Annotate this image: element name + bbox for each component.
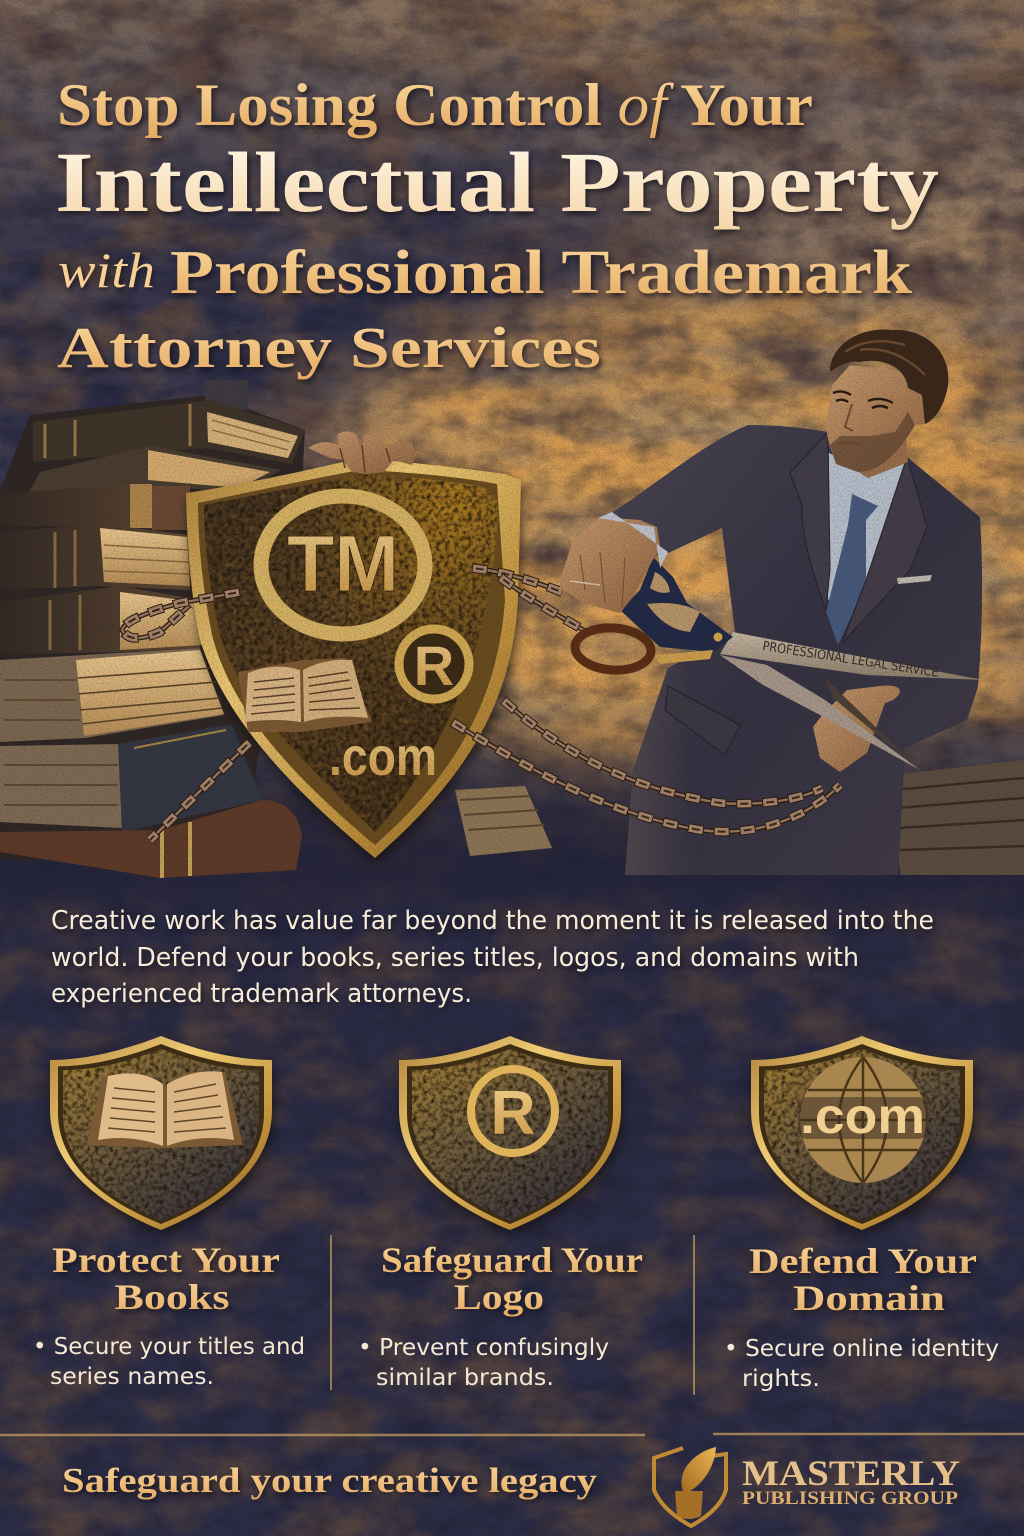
column: defend your domain <box>724 1036 999 1392</box>
book 3 <box>0 484 190 530</box>
registered letter: R <box>491 1079 535 1148</box>
attorney in suit <box>600 329 982 875</box>
shield outer frame <box>186 458 521 858</box>
ring on finger <box>570 581 600 585</box>
heading line 1: Safeguard Your <box>381 1240 643 1280</box>
shield icon: book <box>50 1036 272 1230</box>
logo: Masterly Publishing Group <box>654 1447 960 1526</box>
bullet line 2: rights. <box>742 1366 820 1392</box>
bullet line 1: • Secure your titles and <box>33 1334 305 1360</box>
main shield with TM, R, book and .com <box>186 431 521 858</box>
chain upper right <box>472 568 587 632</box>
footer tagline: Safeguard your creative legacy <box>62 1461 598 1500</box>
lower hand holding blade <box>813 686 900 772</box>
R circle <box>399 629 469 699</box>
bullet line 2: series names. <box>50 1364 214 1390</box>
TM ring <box>261 496 425 634</box>
registered circle <box>471 1069 555 1153</box>
lapel left <box>790 432 830 610</box>
heading line 2: Books <box>114 1277 230 1317</box>
.com label: .com <box>800 1088 925 1144</box>
R letter: R <box>414 634 454 697</box>
title line 4: Attorney Services <box>57 315 601 380</box>
book stack, lower right <box>893 760 1024 875</box>
scissor pivot screw <box>714 632 722 642</box>
illustration: stacked old books <box>0 380 1024 878</box>
lapel right <box>842 457 927 643</box>
bullet line 1: • Secure online identity <box>724 1336 999 1362</box>
hair <box>830 329 948 424</box>
jacket body <box>600 425 982 875</box>
heading <box>52 1240 280 1317</box>
intro line 2: world. Defend your books, series titles, logos, and domains with <box>51 943 859 973</box>
nose and mouth <box>836 404 862 445</box>
title word with: with <box>58 242 155 298</box>
book 6 <box>0 648 224 742</box>
intro line 3: experienced trademark attorneys. <box>51 979 472 1009</box>
upper hand on scissors <box>560 512 668 613</box>
chains binding the shield <box>122 568 840 840</box>
scissor blade sliver <box>825 678 920 770</box>
title <box>55 72 939 380</box>
chain lower long <box>503 700 822 804</box>
book 7 <box>0 724 262 832</box>
chain left loop <box>122 592 240 638</box>
bullet line 2: similar brands. <box>376 1365 554 1391</box>
bullet line 1: • Prevent confusingly <box>358 1335 609 1361</box>
column: safeguard your logo <box>358 1036 643 1391</box>
brows and eyes <box>833 391 893 408</box>
logo shield with quill and inkpot <box>654 1447 726 1526</box>
heading line 2: Logo <box>454 1277 544 1317</box>
scissor upper handle <box>620 557 733 652</box>
logo name: MASTERLY <box>742 1453 960 1493</box>
heading line 1: Defend Your <box>749 1241 977 1281</box>
hand gripping shield top <box>308 431 415 474</box>
jacket pocket <box>665 686 740 755</box>
shield inner bevel <box>198 470 505 845</box>
open book icon <box>87 1071 243 1148</box>
title line 2: Intellectual Property <box>55 134 939 230</box>
title line 3: Professional Trademark <box>170 239 913 307</box>
logo subtitle: PUBLISHING GROUP <box>742 1488 958 1509</box>
blade engraved text: PROFESSIONAL LEGAL SERVICE <box>761 639 940 681</box>
shield icon: registered <box>399 1036 621 1230</box>
column: protect your books <box>33 1036 305 1390</box>
shield icon: globe <box>751 1036 973 1230</box>
scissor top blade <box>720 632 983 680</box>
scissor handle opening <box>647 603 700 632</box>
book 8 <box>0 800 302 878</box>
shirt cuff <box>598 512 668 568</box>
book 2 <box>28 446 282 494</box>
book behind shield, right <box>455 786 552 856</box>
bullet text <box>358 1335 609 1391</box>
shirt <box>828 452 908 600</box>
beard shadow <box>830 412 915 472</box>
book 1 <box>33 380 305 464</box>
chain lowest long <box>452 722 840 832</box>
open book <box>238 658 372 732</box>
chain lower left <box>150 742 250 840</box>
bullet text <box>33 1334 305 1390</box>
heading line 2: Domain <box>793 1278 945 1318</box>
jacket lower fade <box>625 640 760 875</box>
scissor lower blade <box>720 655 920 770</box>
pocket square <box>897 575 932 584</box>
book 5 <box>0 586 202 654</box>
tie <box>826 494 878 645</box>
intro paragraph <box>51 906 934 1009</box>
title line 1: Stop Losing Control of Your <box>57 72 813 138</box>
TM text: TM <box>287 519 399 608</box>
shield bronze field <box>204 474 498 832</box>
intro line 1: Creative work has value far beyond the moment it is released into the <box>51 906 934 936</box>
scissor gold fitting <box>655 650 713 664</box>
.com text: .com <box>329 727 437 787</box>
scissor handle loop <box>574 625 652 673</box>
book 4 <box>0 524 190 590</box>
neck <box>838 425 908 478</box>
face <box>826 365 932 472</box>
scissor small opening <box>650 572 670 593</box>
heading line 1: Protect Your <box>52 1240 280 1280</box>
bullet text <box>724 1336 999 1392</box>
globe <box>798 1057 928 1183</box>
heading <box>381 1240 643 1317</box>
heading <box>749 1241 977 1318</box>
large scissors <box>574 557 983 770</box>
